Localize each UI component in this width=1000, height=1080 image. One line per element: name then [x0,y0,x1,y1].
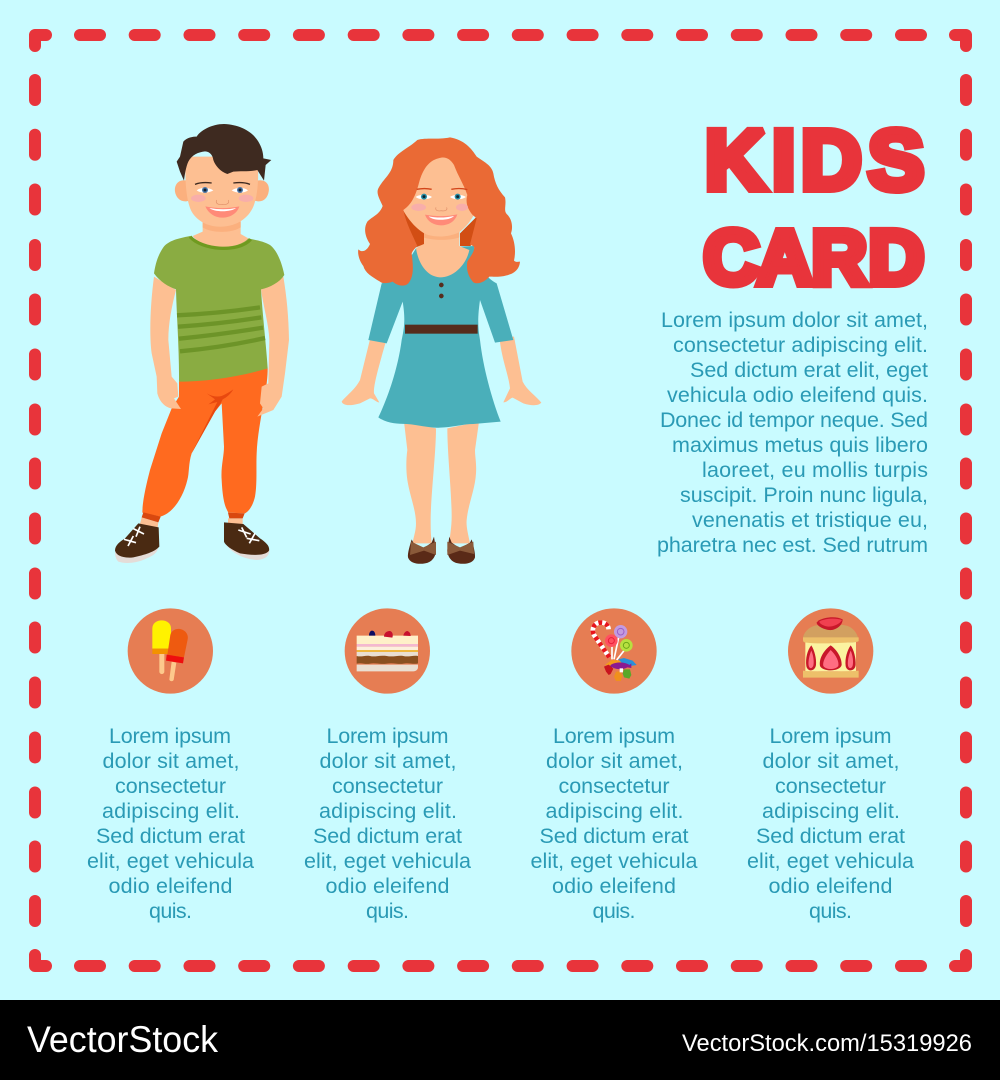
intro text block: Donec id tempor neque. Sed [660,408,928,432]
intro text block: Sed dictum erat elit, eget [690,358,928,382]
boy shoe laces [124,527,259,546]
intro text block: pharetra nec est. Sed rutrum [657,533,928,557]
intro text block: laoreet, eu mollis turpis [702,458,928,482]
caption column 3: Sed dictum erat [540,824,689,848]
boy t-shirt stripes [177,307,265,351]
boy face [185,157,258,227]
caption column 2: odio eleifend [326,874,450,898]
girl neck shadow [423,232,459,240]
boy neck shadow [203,222,241,232]
intro text block: consectetur adipiscing elit. [673,333,928,357]
girl belt [405,325,478,334]
caption column 3 [530,724,698,923]
girl shoes [408,537,475,564]
caption column 4: quis. [809,899,852,923]
intro text block: vehicula odio eleifend quis. [667,383,928,407]
boy neck [193,217,248,247]
girl dress [368,246,513,428]
boy arms [150,277,289,417]
caption column 2: consectetur [332,774,443,798]
boy nose [216,200,229,205]
boy collar [190,237,251,248]
watermark logo text: VectorStock [27,1019,218,1060]
caption column 1: adipiscing elit. [102,799,240,823]
caption column 4: Sed dictum erat [756,824,905,848]
title: KIDS CARD [704,113,924,301]
intro text block: suscipit. Proin nunc ligula, [680,483,928,507]
girl face [403,150,473,237]
boy mouth [205,206,239,218]
caption column 2: Sed dictum erat [313,824,462,848]
caption column 3: Lorem ipsum [553,724,675,748]
caption column 3: elit, eget vehicula [530,849,698,873]
caption column 1: elit, eget vehicula [87,849,254,873]
boy shoes [115,522,269,558]
caption column 2: quis. [366,899,409,923]
caption column 4 [747,724,914,923]
caption column 2 [304,724,471,923]
girl eyes [416,189,467,200]
icon: strawberry cake [788,608,873,694]
caption column 3: odio eleifend [552,874,676,898]
caption column 1: dolor sit amet, [102,749,240,773]
intro text block: maximus metus quis libero [672,433,928,457]
caption column 4: elit, eget vehicula [747,849,914,873]
girl hair [358,137,520,286]
caption column 2: Lorem ipsum [326,724,448,748]
boy eyes [195,183,250,193]
boy shoe soles [115,542,269,563]
boy ankles [139,517,243,530]
girl chest and neck [416,227,469,277]
girl nose [436,207,447,211]
girl arms [342,337,541,405]
boy cheeks [191,195,253,202]
caption column 4: Lorem ipsum [770,724,892,748]
icon: layered cake slice [345,608,430,694]
title word CARD: CARD [704,215,924,301]
girl dark back hair [403,209,478,247]
caption column 1: consectetur [115,774,226,798]
boy illustration [115,124,289,563]
caption column 3: consectetur [558,774,670,798]
caption column 1: Lorem ipsum [109,724,231,748]
watermark url text: VectorStock.com/15319926 [682,1030,972,1057]
caption column 4: consectetur [775,774,886,798]
boy trousers folds [192,389,233,453]
caption column 3: quis. [592,899,636,923]
icon: candy and lollipops [571,608,657,694]
caption column 1 [87,724,254,923]
intro text block: Lorem ipsum dolor sit amet, [661,308,928,332]
boy ears [175,180,269,201]
boy hair [177,124,271,181]
girl shoe bows [410,542,474,555]
caption column 2: adipiscing elit. [319,799,457,823]
boy t-shirt [154,236,284,382]
boy trouser cuffs [142,512,245,522]
girl legs [404,422,479,543]
boy trousers [142,368,268,517]
intro text block [657,308,928,557]
girl illustration [342,137,541,564]
caption column 4: dolor sit amet, [762,749,900,773]
girl cheeks [411,204,468,211]
caption column 4: odio eleifend [768,874,892,898]
intro text block: venenatis et tristique eu, [692,508,928,532]
title word KIDS: KIDS [705,113,924,207]
caption column 2: dolor sit amet, [320,749,456,773]
caption column 3: adipiscing elit. [546,799,684,823]
girl mouth [425,214,457,225]
caption column 3: dolor sit amet, [546,749,683,773]
caption column 1: quis. [149,899,192,923]
caption column 4: adipiscing elit. [762,799,900,823]
caption column 1: odio eleifend [108,874,232,898]
girl dress buttons [439,283,444,298]
caption column 2: elit, eget vehicula [304,849,471,873]
icon: ice lollies [128,608,213,694]
caption column 1: Sed dictum erat [96,824,245,848]
